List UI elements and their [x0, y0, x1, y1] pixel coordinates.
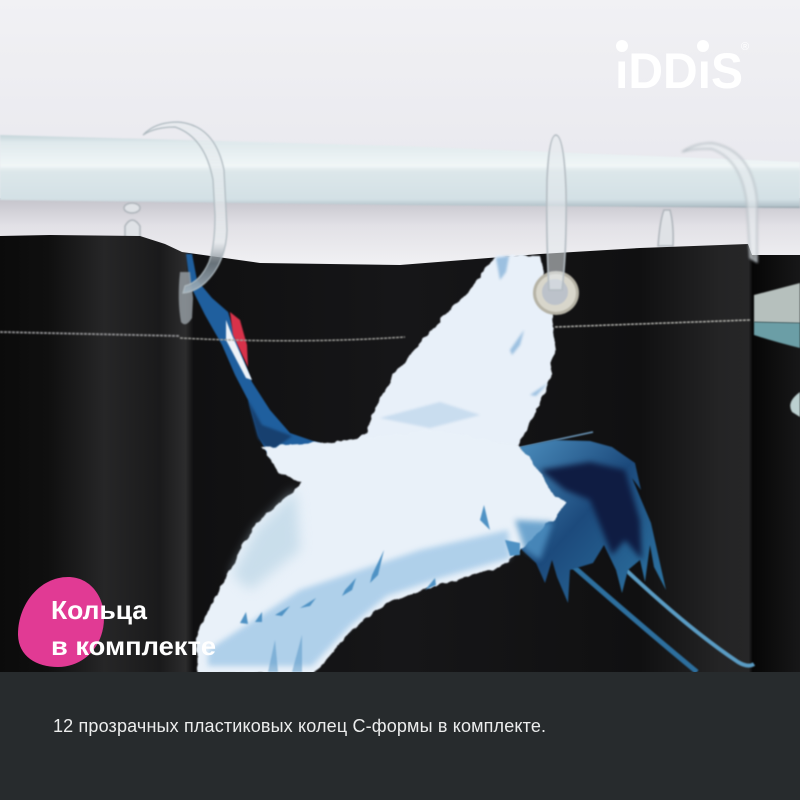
lower wing blue marks: [240, 505, 553, 672]
crane neck dark shading: [248, 400, 292, 452]
crane neck: [186, 254, 322, 458]
crane head red patch: [230, 312, 248, 367]
crane body and lower wing: [197, 430, 566, 674]
IDDIS logo: ıDDıS: [615, 43, 743, 99]
right panel teal band: [754, 322, 800, 348]
white wall background: [0, 0, 800, 200]
left eyelet clip: [179, 272, 193, 324]
ghost rings behind the curtain: [124, 203, 673, 246]
wall below the rod: [0, 198, 800, 278]
left C-ring: [143, 122, 227, 293]
right panel crane fragment: [754, 283, 800, 323]
pink blob accent: [18, 577, 104, 667]
curtain rod: [0, 135, 800, 208]
crane dark tail: [520, 440, 666, 603]
lower wing shadow tint: [232, 490, 300, 590]
crane head white stripe: [226, 320, 252, 380]
metal grommet: [533, 271, 579, 315]
middle C-ring: [547, 135, 566, 290]
upper wing blue marks: [380, 256, 548, 428]
bottom caption band: [0, 672, 800, 800]
heading: в комплекте: [51, 631, 216, 661]
lower wing feather tint: [208, 530, 510, 666]
IDDIS logo: ®: [741, 41, 749, 53]
crane tail long feathers: [518, 432, 754, 672]
caption text: 12 прозрачных пластиковых колец С-формы в комплекте.: [53, 716, 546, 736]
crane illustration: [186, 254, 800, 674]
curtain fabric: [0, 235, 800, 672]
crane upper wing: [356, 255, 555, 447]
curtain stitch line: [0, 320, 750, 341]
right panel pale fragment: [790, 392, 800, 417]
tail darkest feathers: [540, 462, 642, 560]
heading: Кольца: [51, 595, 148, 625]
heading: [51, 595, 216, 661]
right C-ring: [682, 143, 757, 262]
